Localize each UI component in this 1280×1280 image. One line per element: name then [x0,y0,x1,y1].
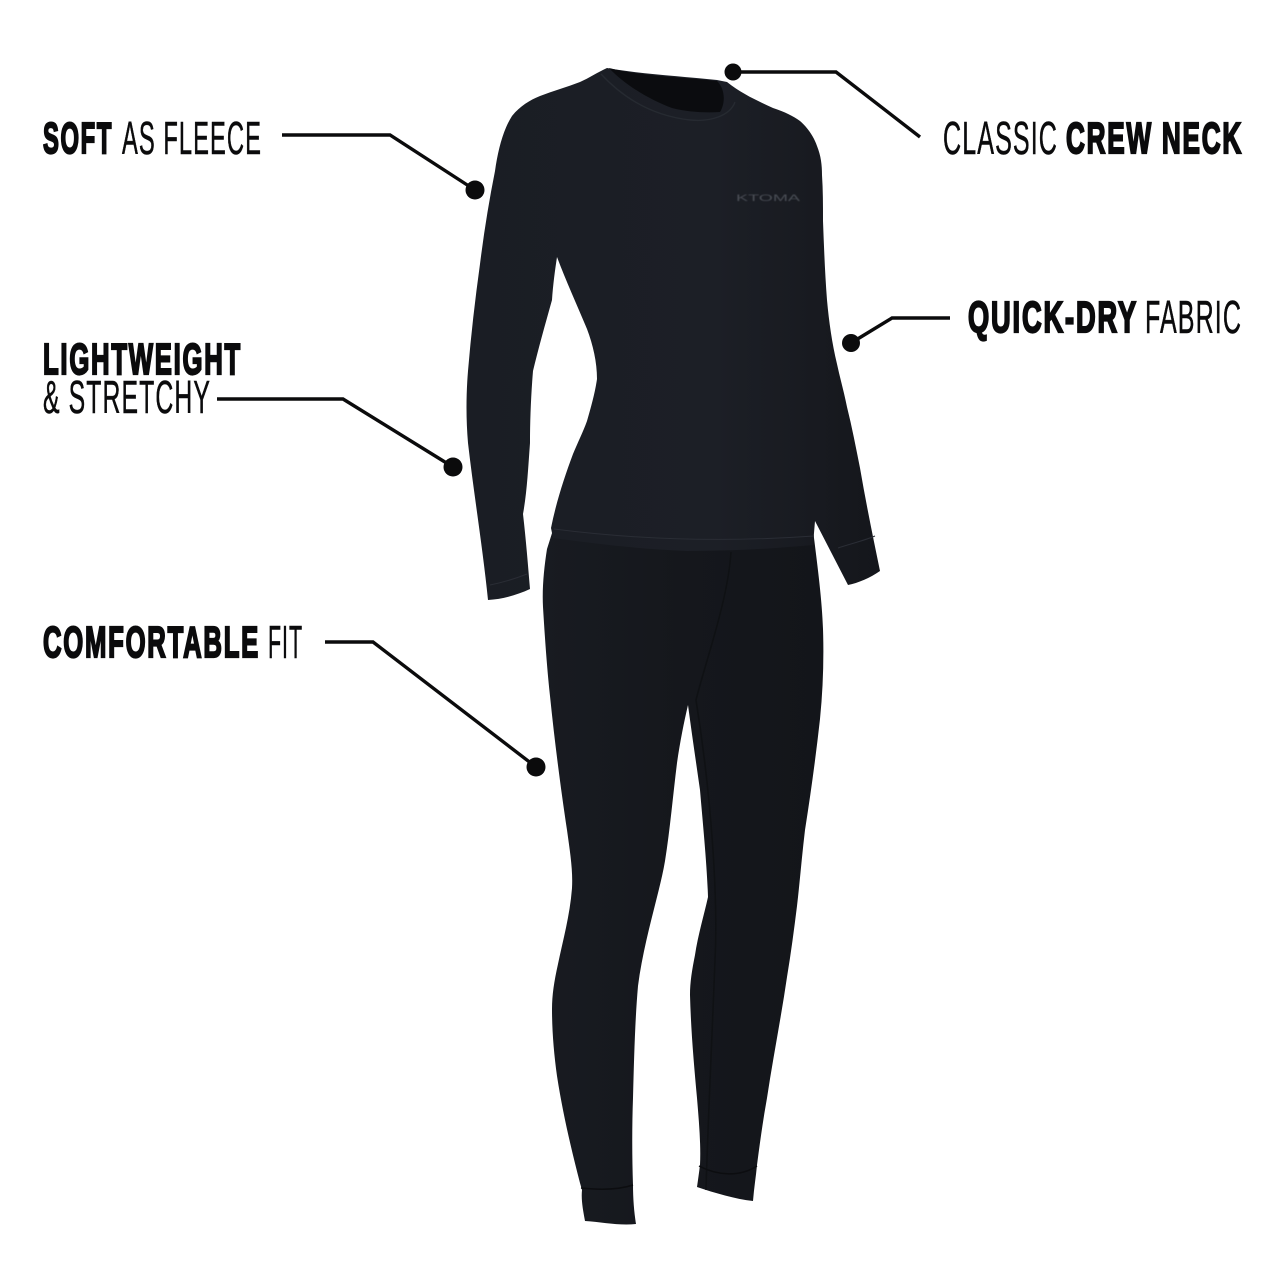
left ankle cuff stitch [581,1185,633,1189]
callout: soft as fleece [43,112,484,200]
callout: lightweight and stretchy [43,335,462,476]
callout: classic crew neck: CLASSIC [943,112,1058,164]
right cuff stitch [838,536,875,548]
right ankle cuff stitch [699,1166,757,1174]
left cuff stitch [490,574,527,585]
callout: quick-dry fabric [842,291,1242,352]
chest logo: KTOMA [736,193,800,203]
neck opening [609,68,724,112]
callout: comfortable fit: FIT [268,616,303,668]
callout: comfortable fit [43,616,546,776]
legging seam [696,552,731,1190]
callout: soft as fleece: SOFT [43,114,113,163]
long-sleeve shirt [466,68,880,600]
callout: classic crew neck [724,64,1243,164]
callout: lightweight and stretchy: & STRETCHY [43,371,211,423]
callout: quick-dry fabric: QUICK-DRY [968,293,1138,342]
leggings [543,530,823,1225]
collar rib [601,74,735,120]
shirt hem stitch [554,529,814,539]
callout: comfortable fit: COMFORTABLE [43,618,260,667]
callout: lightweight and stretchy: LIGHTWEIGHT [43,335,242,384]
callout: soft as fleece: AS FLEECE [122,112,262,164]
